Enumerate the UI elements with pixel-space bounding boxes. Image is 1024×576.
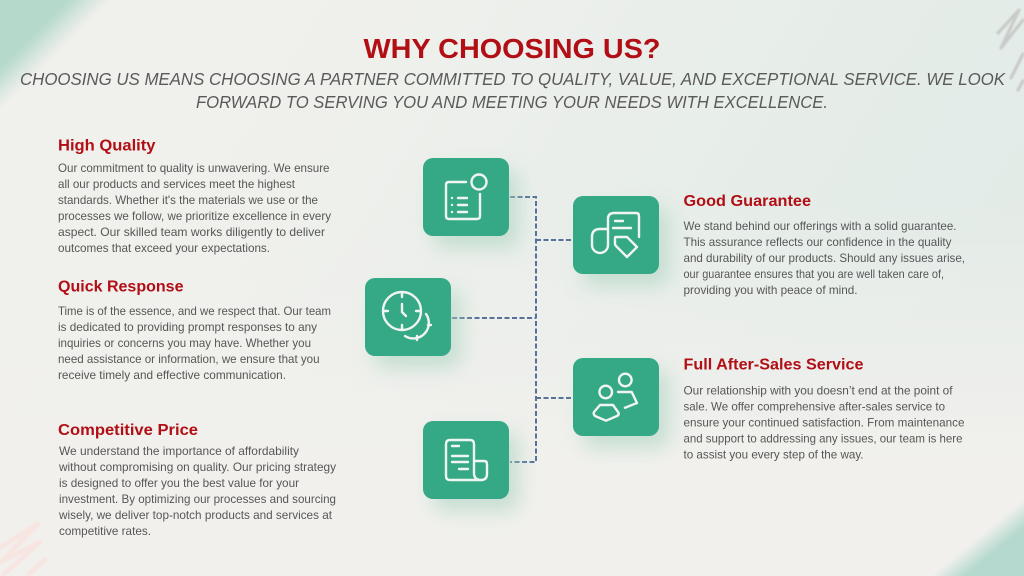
text block: competitive price: competitive rates. [59,524,151,538]
text block: high quality: all our products and services meet the highest [58,177,296,191]
scribble top right [998,10,1023,90]
panel: good guarantee [684,193,965,297]
heading: quick response: Quick Response [58,278,184,296]
text block: full after-sales service: sale. We offer comprehensive after-sales service to [684,400,945,414]
text block: quick response: Time is of the essence, and we respect that. Our team [58,304,331,318]
text block: competitive price: investment. By optimizing our processes and sourcing [59,492,336,506]
text block: good guarantee: and durability of our products. Should any issues arise, [684,251,965,265]
text block: quick response: need assistance or information, we ensure that you [58,352,320,366]
scribble bottom left [1,524,45,574]
text block: high quality: processes we follow, we prioritize excellence in every [58,209,331,223]
heading: competitive price: Competitive Price [58,422,198,439]
text block: quick response: is dedicated to providing prompt responses to any [58,320,317,334]
icon: clock [383,292,431,340]
text block: full after-sales service: ensure your continued satisfaction. From maintenance [684,416,965,430]
text block: quick response: receive timely and effective communication. [58,368,286,382]
subtitle [20,69,1006,112]
icon card: people [573,358,669,448]
text block: good guarantee [684,219,965,297]
text block: high quality: standards. Whether it's the materials we use or the [58,193,318,207]
text block: high quality [58,161,331,255]
title: WHY CHOOSING US? [364,33,660,64]
heading: good guarantee: Good Guarantee [684,193,811,210]
icon card: clock [365,278,461,368]
connector lines [452,197,573,462]
text block: good guarantee: This assurance reflects our confidence in the quality [684,235,952,249]
icon card: guarantee [573,196,669,286]
text block: full after-sales service: to assist you every step of the way. [684,448,864,462]
heading: full after-sales service: Full After-Sales Service [684,356,864,374]
text block: good guarantee: our guarantee ensures that you are well taken care of, [684,267,944,281]
text block: high quality: Our commitment to quality is unwavering. We ensure [58,161,330,175]
icon: document [446,440,487,480]
text block: competitive price [58,444,336,538]
text block: good guarantee: providing you with peace of mind. [684,283,858,297]
subtitle: FORWARD TO SERVING YOU AND MEETING YOUR NEEDS WITH EXCELLENCE. [196,92,828,112]
panel: full after-sales service [684,356,965,462]
icon: people [594,374,637,421]
text block: full after-sales service: and support to addressing any issues, our team is here [684,432,963,446]
text block: competitive price: is designed to offer you the best value for your [59,476,299,490]
icon: checklist [446,174,486,219]
text block: quick response: inquiries or concerns you may have. Whether you [58,336,311,350]
panel: quick response [58,278,331,382]
text block: full after-sales service [684,384,965,462]
panel: competitive price [58,422,336,538]
text block: good guarantee: We stand behind our offerings with a solid guarantee. [684,219,956,233]
text block: high quality: aspect. Our skilled team works diligently to deliver [58,225,325,239]
icon: guarantee tag [592,213,639,257]
icon card: document [423,421,519,511]
text block: competitive price: wisely, we deliver top-notch products and services at [58,508,333,522]
heading: high quality: High Quality [58,138,156,154]
panel: high quality [58,138,331,255]
icon card: checklist [423,158,519,248]
text block: high quality: outcomes that exceed your expectations. [58,241,270,255]
text block: quick response [58,304,331,382]
text block: full after-sales service: Our relationship with you doesn’t end at the point of [684,384,953,398]
text block: competitive price: without compromising on quality. Our pricing strategy [58,460,336,474]
text block: competitive price: We understand the importance of affordability [59,444,299,458]
